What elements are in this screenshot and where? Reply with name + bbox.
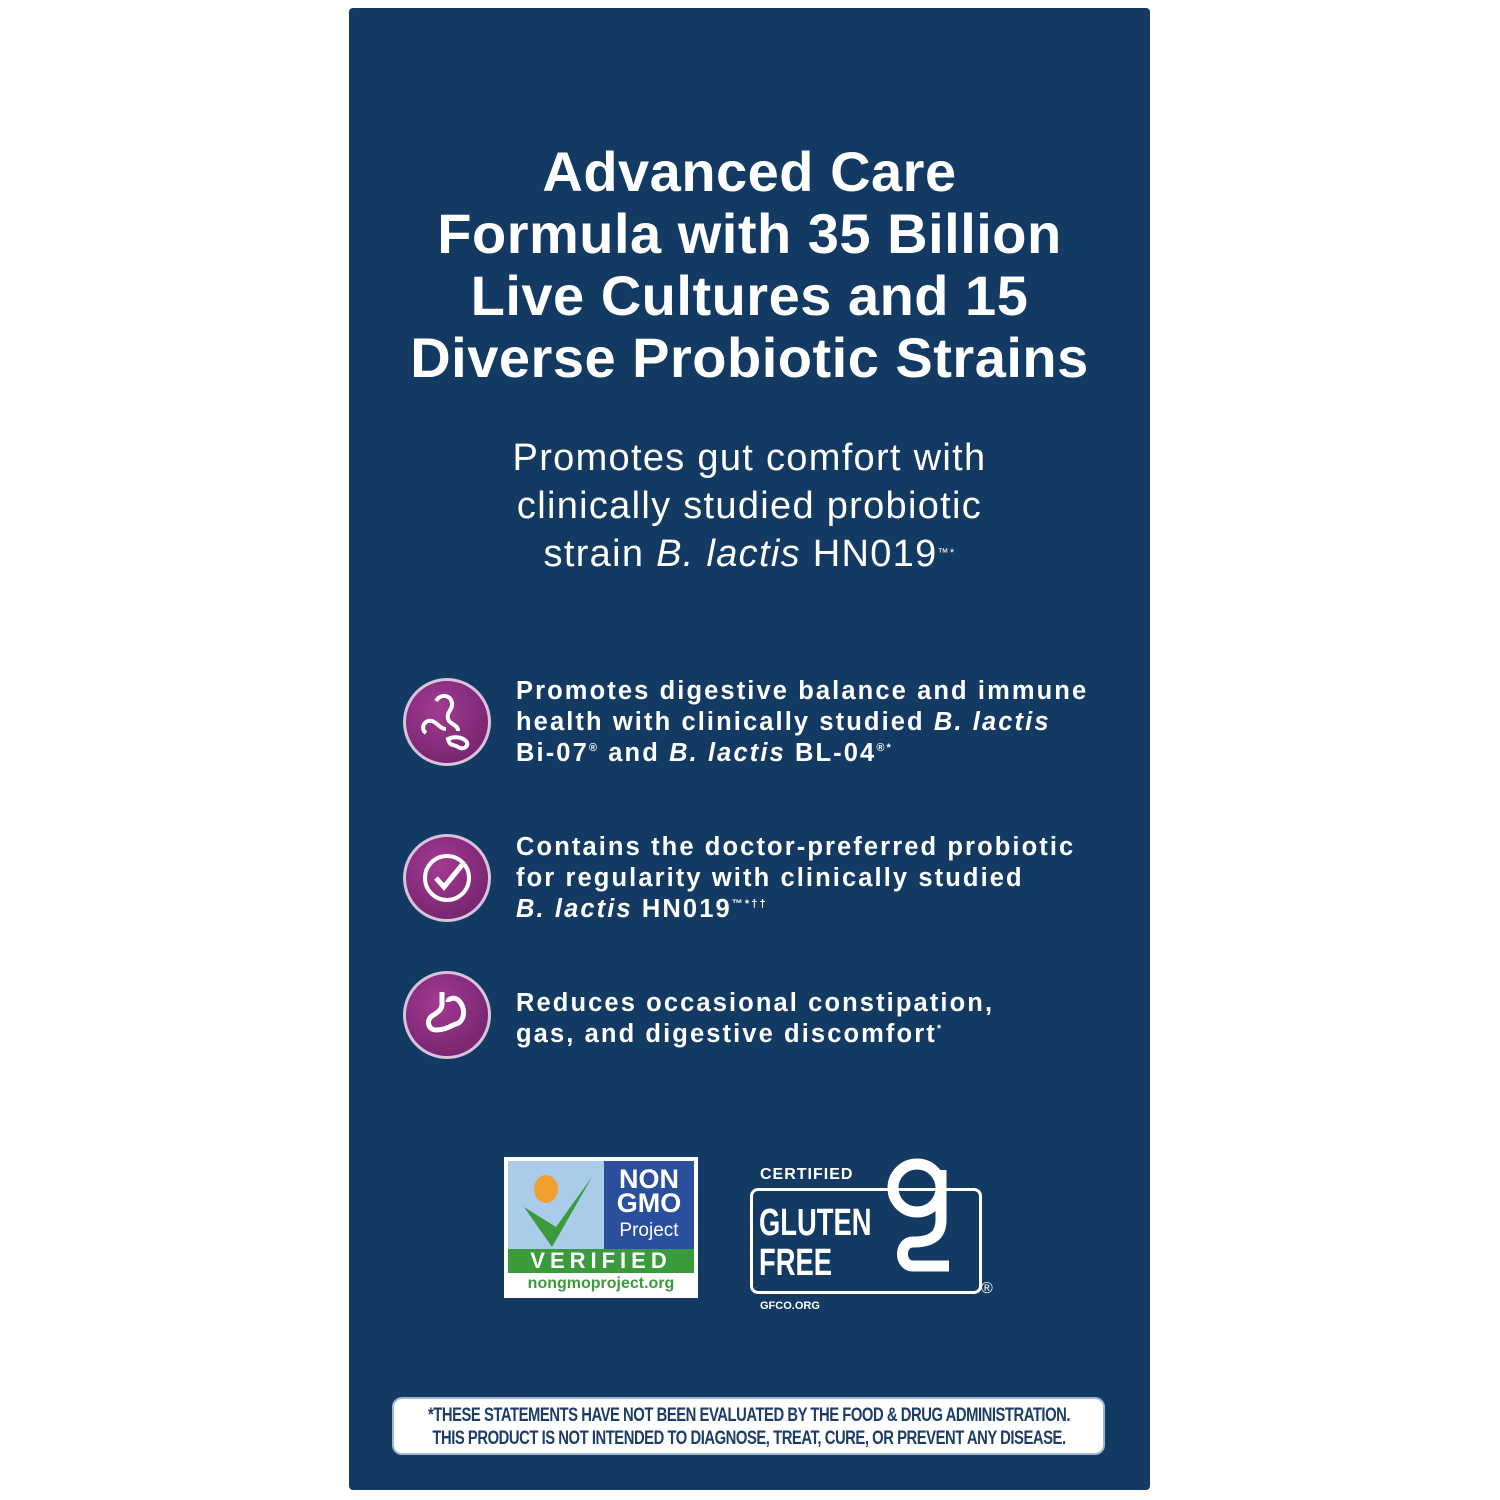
bullet text 3 xyxy=(516,989,994,1048)
logo: non gmo: Project xyxy=(619,1220,679,1241)
logo: gluten free: FREE xyxy=(759,1242,832,1284)
title: Diverse Probiotic Strains xyxy=(410,326,1089,389)
title xyxy=(410,140,1089,389)
disclaimer box: *THESE STATEMENTS HAVE NOT BEEN EVALUATED BY THE FOOD & DRUG ADMINISTRATION. xyxy=(428,1405,1070,1426)
logo: non gmo: NON xyxy=(619,1164,679,1194)
bullet text 3: Reduces occasional constipation, xyxy=(516,989,994,1017)
logo: non gmo: GMO xyxy=(617,1188,681,1218)
disclaimer box: THIS PRODUCT IS NOT INTENDED TO DIAGNOSE, TREAT, CURE, OR PREVENT ANY DISEASE. xyxy=(432,1428,1066,1449)
bullet text 2: B. lactis HN019™*†† xyxy=(516,895,768,923)
bullet text 1 xyxy=(516,677,1088,767)
title: Formula with 35 Billion xyxy=(437,202,1062,265)
bullet text 1: Promotes digestive balance and immune xyxy=(516,677,1088,705)
icon: bacteria xyxy=(403,678,491,766)
subtitle xyxy=(513,437,986,575)
bullet text 1: health with clinically studied B. lactis xyxy=(516,708,1051,736)
logo: gluten free: GFCO.ORG xyxy=(760,1300,820,1312)
logo: gluten free: GLUTEN xyxy=(759,1202,871,1244)
logo: gluten free xyxy=(750,1158,993,1312)
subtitle: Promotes gut comfort with xyxy=(513,437,986,479)
panel: product box xyxy=(349,8,1150,1490)
title: Advanced Care xyxy=(542,140,957,203)
logo: gluten free: CERTIFIED xyxy=(760,1166,853,1183)
bullet text 3: gas, and digestive discomfort* xyxy=(516,1020,943,1048)
logo: non gmo xyxy=(504,1157,698,1298)
title: Live Cultures and 15 xyxy=(471,264,1028,327)
bullet text 2: for regularity with clinically studied xyxy=(516,864,1024,892)
logo: non gmo: nongmoproject.org xyxy=(528,1275,674,1292)
icon: check xyxy=(403,834,491,922)
icon: stomach xyxy=(403,971,491,1059)
bullet text 1: Bi-07® and B. lactis BL-04®* xyxy=(516,739,893,767)
subtitle: strain B. lactis HN019™* xyxy=(544,533,955,575)
bullet text 2 xyxy=(516,833,1075,923)
disclaimer box xyxy=(392,1397,1105,1455)
logo: non gmo: VERIFIED xyxy=(530,1248,672,1273)
logo: gluten free: ® xyxy=(981,1280,993,1297)
subtitle: clinically studied probiotic xyxy=(517,485,982,527)
bullet text 2: Contains the doctor-preferred probiotic xyxy=(516,833,1075,861)
